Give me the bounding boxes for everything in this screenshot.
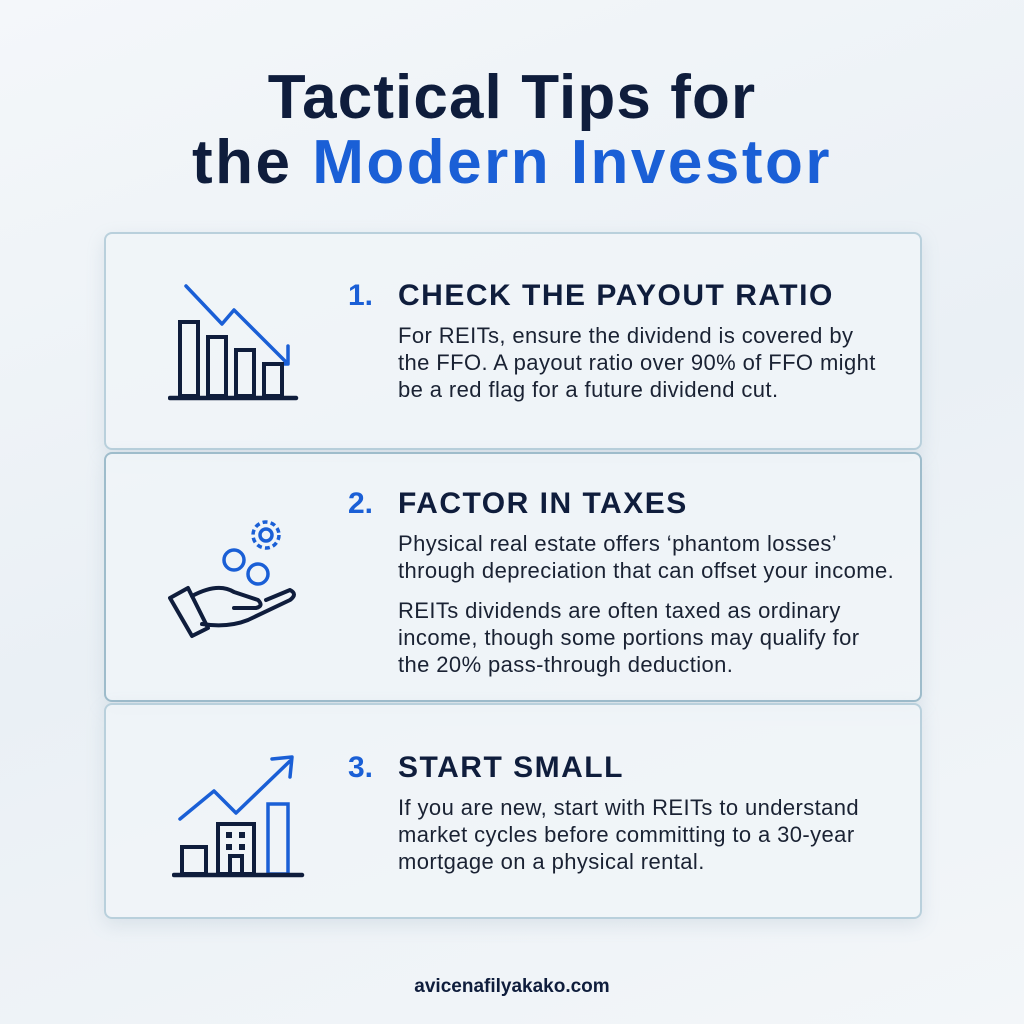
body text [398,795,859,874]
body text: Physical real estate offers ‘phantom losses’ [398,531,837,556]
panel: taxes [104,452,922,702]
body text: market cycles before committing to a 30-year [398,822,855,847]
icon: declining bar chart [168,284,298,400]
body text: the FFO. A payout ratio over 90% of FFO might [398,350,876,375]
body text 2 [398,598,860,677]
heading: FACTOR IN TAXES [398,487,688,520]
body text: If you are new, start with REITs to understand [398,795,859,820]
footer: avicenafilyakako.com [414,976,610,997]
body text 2: the 20% pass-through deduction. [398,652,733,677]
heading: 2. [348,487,373,520]
body text 2: income, though some portions may qualify for [398,625,860,650]
icon: hand with coins and gear [168,520,296,638]
body text 2: REITs dividends are often taxed as ordinary [398,598,841,623]
heading: START SMALL [398,751,624,784]
heading: CHECK THE PAYOUT RATIO [398,279,834,312]
body text: For REITs, ensure the dividend is covered by [398,323,853,348]
title: Tactical Tips for [268,63,756,132]
heading: 1. [348,279,373,312]
body text: be a red flag for a future dividend cut. [398,377,778,402]
icon: rising chart with building [172,755,304,878]
body text [398,323,876,402]
title: the Modern Investor [192,128,832,197]
body text [398,531,894,583]
body text: mortgage on a physical rental. [398,849,705,874]
body text: through depreciation that can offset your income. [398,558,894,583]
panel: start small [104,703,922,919]
heading: 3. [348,751,373,784]
title [192,63,832,197]
panel: payout ratio [104,232,922,450]
